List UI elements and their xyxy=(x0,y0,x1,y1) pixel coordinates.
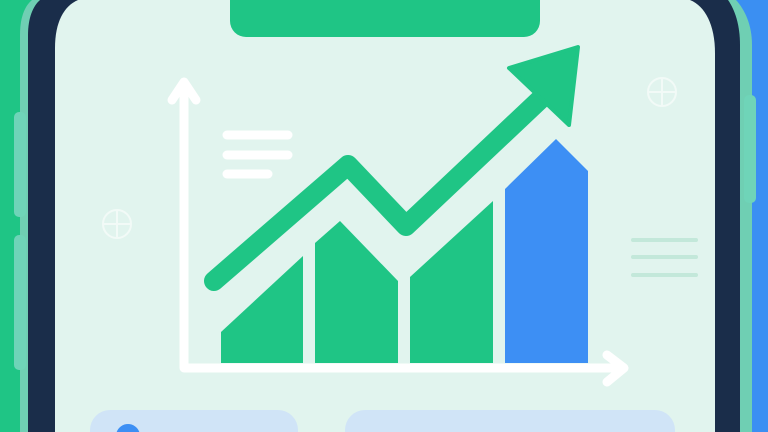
notch tab xyxy=(230,0,540,37)
bottom card left xyxy=(90,410,298,432)
decorative icon: crosshair left xyxy=(103,210,131,238)
trend arrow xyxy=(214,47,578,281)
text lines: left legend xyxy=(227,135,288,174)
axes xyxy=(172,82,624,382)
bar chart xyxy=(221,139,588,363)
text lines: right faint xyxy=(633,240,696,275)
decorative icon: crosshair right xyxy=(648,78,676,106)
bottom card right xyxy=(345,410,675,432)
